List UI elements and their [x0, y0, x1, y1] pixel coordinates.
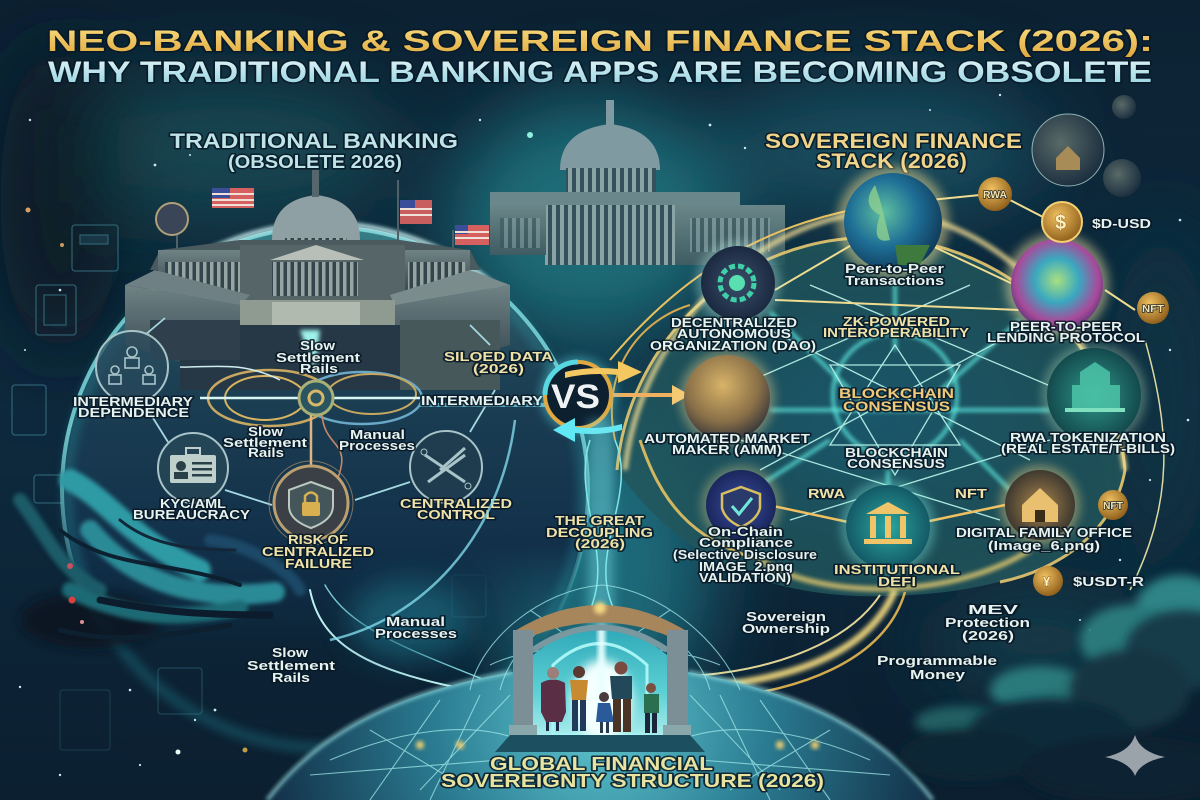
- labels: traditional banking: Settlement: [276, 350, 361, 365]
- labels: traditional banking: Slow: [300, 338, 336, 353]
- labels: bottom callouts: Money: [910, 667, 966, 682]
- labels: traditional banking: Processes: [339, 438, 415, 453]
- icon: KYC/AML badge: [158, 433, 228, 503]
- labels: bottom callouts: Slow: [272, 645, 309, 660]
- panel: traditional banking globe: [20, 223, 588, 753]
- labels: sovereign finance stack: RWA TOKENIZATION: [1010, 430, 1166, 445]
- node: RWA tokenization: [1042, 343, 1146, 447]
- labels: sovereign finance stack: (Image_6.png): [988, 538, 1100, 553]
- node: DAO: [696, 241, 780, 325]
- labels: traditional banking: KYC/AML: [160, 496, 226, 511]
- icon: risk of failure shield: [269, 461, 353, 545]
- node: on-chain compliance: [701, 465, 781, 545]
- labels: sovereign finance stack: RWA: [808, 486, 846, 501]
- building: distant capitol: [490, 100, 785, 265]
- labels: bottom callouts: Processes: [375, 626, 457, 641]
- labels: bottom callouts: MEV: [968, 602, 1019, 617]
- labels: sovereign finance stack: VALIDATION): [699, 570, 791, 585]
- tokens: RWA, $D-USD, NFT and $USDT-R coins: $D-USD: [1092, 216, 1151, 231]
- tokens: RWA, $D-USD, NFT and $USDT-R coins: RWA: [983, 190, 1007, 201]
- glowing cyan mesh: [745, 280, 1050, 500]
- labels: bottom callouts: THE GREAT: [555, 513, 644, 528]
- labels: sovereign finance stack: AUTOMATED MARKET: [644, 431, 810, 446]
- labels: sovereign finance stack: DEFI: [878, 574, 916, 589]
- panel: intermediary knot with connecting arrows: [145, 318, 555, 505]
- labels: sovereign finance stack: DECENTRALIZED: [671, 315, 797, 330]
- labels: bottom callouts: Rails: [272, 670, 310, 685]
- labels: traditional banking: INTERMEDIARY: [73, 394, 193, 409]
- labels: sovereign finance stack: INSTITUTIONAL: [834, 562, 960, 577]
- node: peer-to-peer transactions globe: [837, 166, 949, 278]
- labels: traditional banking: Settlement: [223, 435, 308, 450]
- caption: global financial sovereignty structure: [441, 754, 824, 791]
- icon: sparkle watermark: [1105, 735, 1165, 776]
- sovereign gate archway: [495, 602, 705, 752]
- labels: traditional banking: CONTROL: [417, 507, 495, 522]
- node: lending protocol: [1005, 233, 1109, 337]
- labels: traditional banking: SILOED DATA: [444, 349, 554, 364]
- labels: sovereign finance stack: Transactions: [845, 273, 944, 288]
- labels: bottom callouts: [247, 513, 1030, 685]
- teal swirl of crumbling roots: [20, 480, 510, 690]
- heading: traditional banking: TRADITIONAL BANKING: [170, 130, 458, 153]
- labels: sovereign finance stack: On-Chain: [708, 524, 783, 539]
- VS badge with swap arrows: VS: [551, 378, 600, 416]
- labels: sovereign finance stack: INTEROPERABILITY: [823, 325, 969, 340]
- heading: traditional banking: [170, 130, 458, 172]
- labels: bottom callouts: Sovereign: [746, 609, 826, 624]
- family figures: [541, 662, 659, 733]
- clouds lower right: [900, 575, 1200, 800]
- node: automated market maker: [679, 350, 775, 446]
- labels: sovereign finance stack: CONSENSUS: [843, 398, 950, 414]
- labels: traditional banking: Slow: [248, 424, 284, 439]
- labels: sovereign finance stack: BLOCKCHAIN: [845, 445, 948, 460]
- planets in upper right: [1032, 95, 1141, 197]
- daughter: [596, 692, 614, 733]
- labels: traditional banking: DEPENDENCE: [78, 405, 189, 420]
- labels: sovereign finance stack: Compliance: [699, 535, 793, 550]
- mother: [570, 666, 588, 731]
- labels: bottom callouts: Manual: [386, 614, 445, 629]
- labels: bottom callouts: (2026): [962, 628, 1014, 643]
- son: [644, 683, 659, 733]
- tokens: RWA, $D-USD, NFT and $USDT-R coins: NFT: [1142, 304, 1164, 315]
- labels: sovereign finance stack: Peer-to-Peer: [845, 261, 944, 276]
- labels: traditional banking: Rails: [300, 361, 338, 376]
- labels: bottom callouts: (2026): [575, 536, 625, 551]
- panel: sovereign finance stack network: [610, 195, 1164, 700]
- flags: [156, 180, 489, 270]
- heading: sovereign finance stack: [765, 130, 1022, 173]
- tokens: RWA, $D-USD, NFT and $USDT-R coins: $: [1055, 212, 1066, 234]
- icon: centralized control chain: [410, 431, 482, 503]
- labels: traditional banking: BUREAUCRACY: [133, 507, 250, 522]
- labels: traditional banking: FAILURE: [285, 556, 352, 571]
- labels: traditional banking: CENTRALIZED: [262, 544, 374, 559]
- labels: traditional banking: [73, 338, 554, 571]
- VS badge with swap arrows: [540, 357, 642, 442]
- labels: bottom callouts: Programmable: [877, 653, 997, 668]
- labels: bottom callouts: Settlement: [247, 658, 336, 673]
- icon: intermediary dependence: [96, 331, 168, 403]
- title: NEO-BANKING & SOVEREIGN FINANCE STACK (2026):: [47, 25, 1153, 58]
- building: traditional bank capitol: [125, 170, 510, 390]
- heading: traditional banking: (OBSOLETE 2026): [228, 152, 402, 172]
- golden ribbon under institutional DeFi: [760, 550, 1030, 589]
- labels: sovereign finance stack: NFT: [955, 486, 987, 501]
- heading: sovereign finance stack: SOVEREIGN FINANCE: [765, 130, 1022, 153]
- tokens: RWA, $D-USD, NFT and $USDT-R coins: NFT: [1103, 501, 1123, 512]
- labels: traditional banking: RISK OF: [288, 532, 348, 547]
- labels: bottom callouts: Protection: [945, 615, 1030, 630]
- labels: sovereign finance stack: AUTONOMOUS: [677, 326, 791, 341]
- labels: sovereign finance stack: (REAL ESTATE/T-BILLS): [1001, 441, 1175, 456]
- labels: sovereign finance stack: ORGANIZATION (DAO): [650, 338, 816, 353]
- labels: sovereign finance stack: LENDING PROTOCOL: [987, 330, 1145, 345]
- labels: sovereign finance stack: ZK-POWERED: [843, 314, 950, 329]
- labels: sovereign finance stack: (Selective Disclosure: [673, 547, 817, 562]
- labels: traditional banking: Manual: [350, 427, 405, 442]
- labels: sovereign finance stack: BLOCKCHAIN: [839, 385, 954, 401]
- labels: traditional banking: (2026): [473, 361, 524, 376]
- labels: sovereign finance stack: CONSENSUS: [847, 456, 945, 471]
- caption: global financial sovereignty structure: SOVEREIGNTY STRUCTURE (2026): [441, 771, 824, 791]
- node: institutional defi: [841, 480, 935, 574]
- father: [610, 662, 632, 732]
- heading: sovereign finance stack: STACK (2026): [816, 150, 967, 173]
- tokens: RWA, $D-USD, NFT and $USDT-R coins: $USDT-R: [1073, 574, 1145, 589]
- labels: sovereign finance stack: PEER-TO-PEER: [1010, 319, 1123, 334]
- faint document icons on the left edge: [12, 225, 486, 750]
- caption: global financial sovereignty structure: GLOBAL FINANCIAL: [490, 754, 713, 774]
- labels: traditional banking: Rails: [248, 445, 284, 460]
- labels: sovereign finance stack: [644, 261, 1175, 589]
- bottom network globes: [267, 585, 933, 800]
- tokens: RWA, $D-USD, NFT and $USDT-R coins: ¥: [1043, 574, 1051, 589]
- the great decoupling beam and streams: [330, 400, 621, 720]
- title: [47, 25, 1153, 89]
- labels: sovereign finance stack: IMAGE_2.png: [699, 559, 793, 574]
- labels: bottom callouts: DECOUPLING: [546, 525, 653, 540]
- labels: traditional banking: CENTRALIZED: [400, 496, 512, 511]
- labels: bottom callouts: Ownership: [742, 621, 830, 636]
- grandmother: [541, 667, 566, 731]
- title: WHY TRADITIONAL BANKING APPS ARE BECOMING OBSOLETE: [48, 56, 1152, 89]
- labels: sovereign finance stack: DIGITAL FAMILY OFFICE: [956, 525, 1132, 540]
- labels: traditional banking: INTERMEDIARY: [421, 393, 543, 408]
- labels: sovereign finance stack: MAKER (AMM): [672, 442, 782, 457]
- tokens: RWA, $D-USD, NFT and $USDT-R coins: [978, 177, 1169, 596]
- node: digital family office: [1000, 465, 1080, 545]
